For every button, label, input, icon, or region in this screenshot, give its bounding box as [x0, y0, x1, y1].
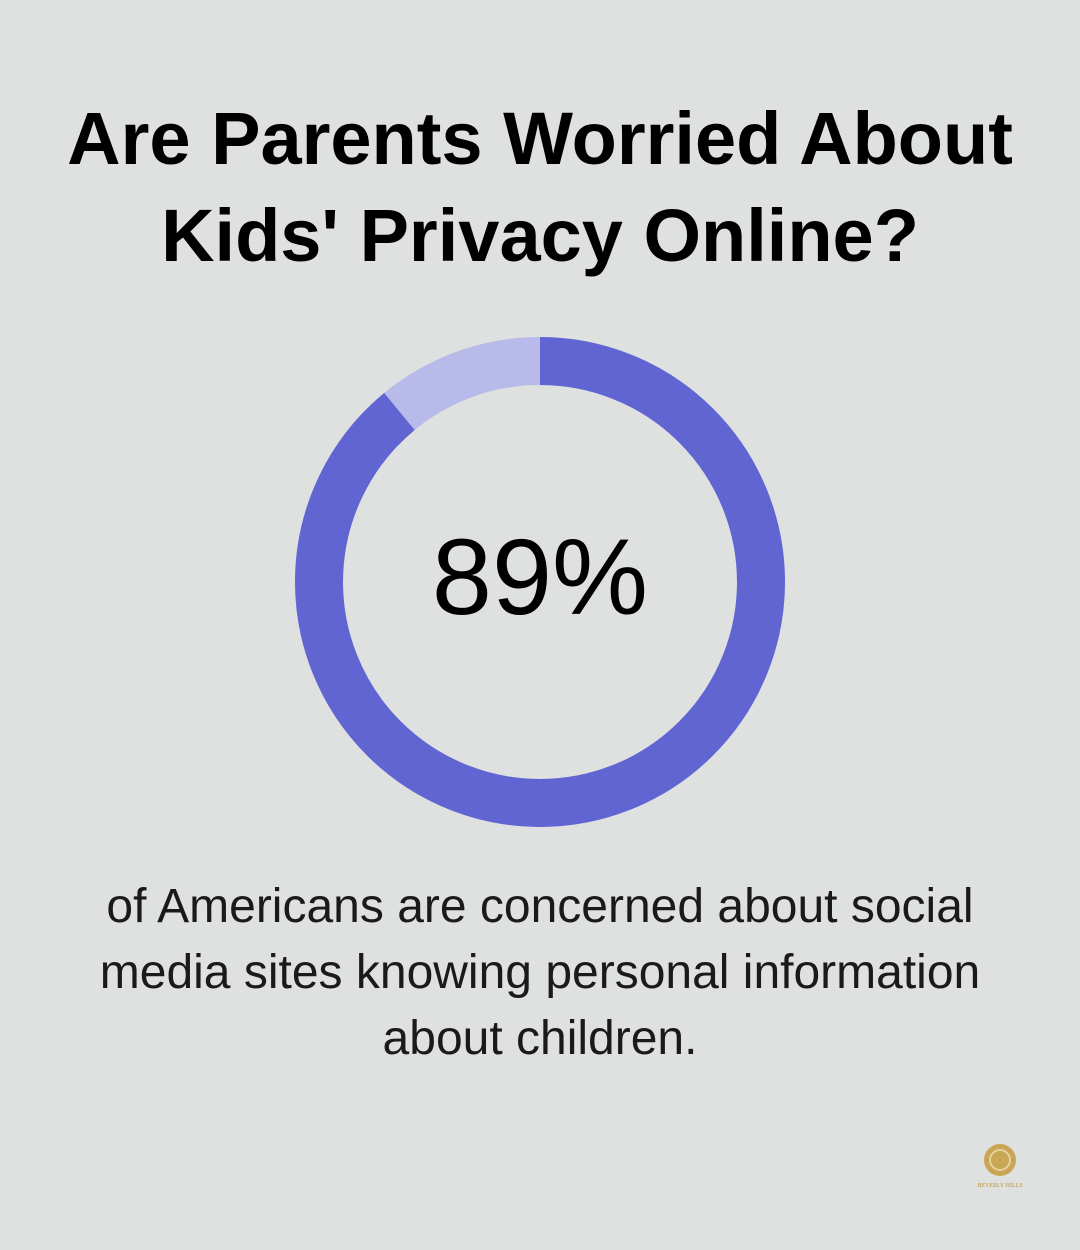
percentage: 89% [432, 516, 648, 637]
description text: of Americans are concerned about social [106, 880, 974, 933]
title [67, 97, 1013, 277]
description text: about children. [383, 1012, 697, 1065]
logo [977, 1144, 1023, 1189]
title: Are Parents Worried About [67, 97, 1013, 180]
title: Kids' Privacy Online? [161, 194, 919, 277]
description text [100, 880, 980, 1065]
ring: 89% segment [319, 361, 761, 803]
ring: remaining 11% [319, 361, 761, 803]
description text: media sites knowing personal information [100, 946, 980, 999]
logo: BEVERLY HILLS [977, 1183, 1023, 1189]
